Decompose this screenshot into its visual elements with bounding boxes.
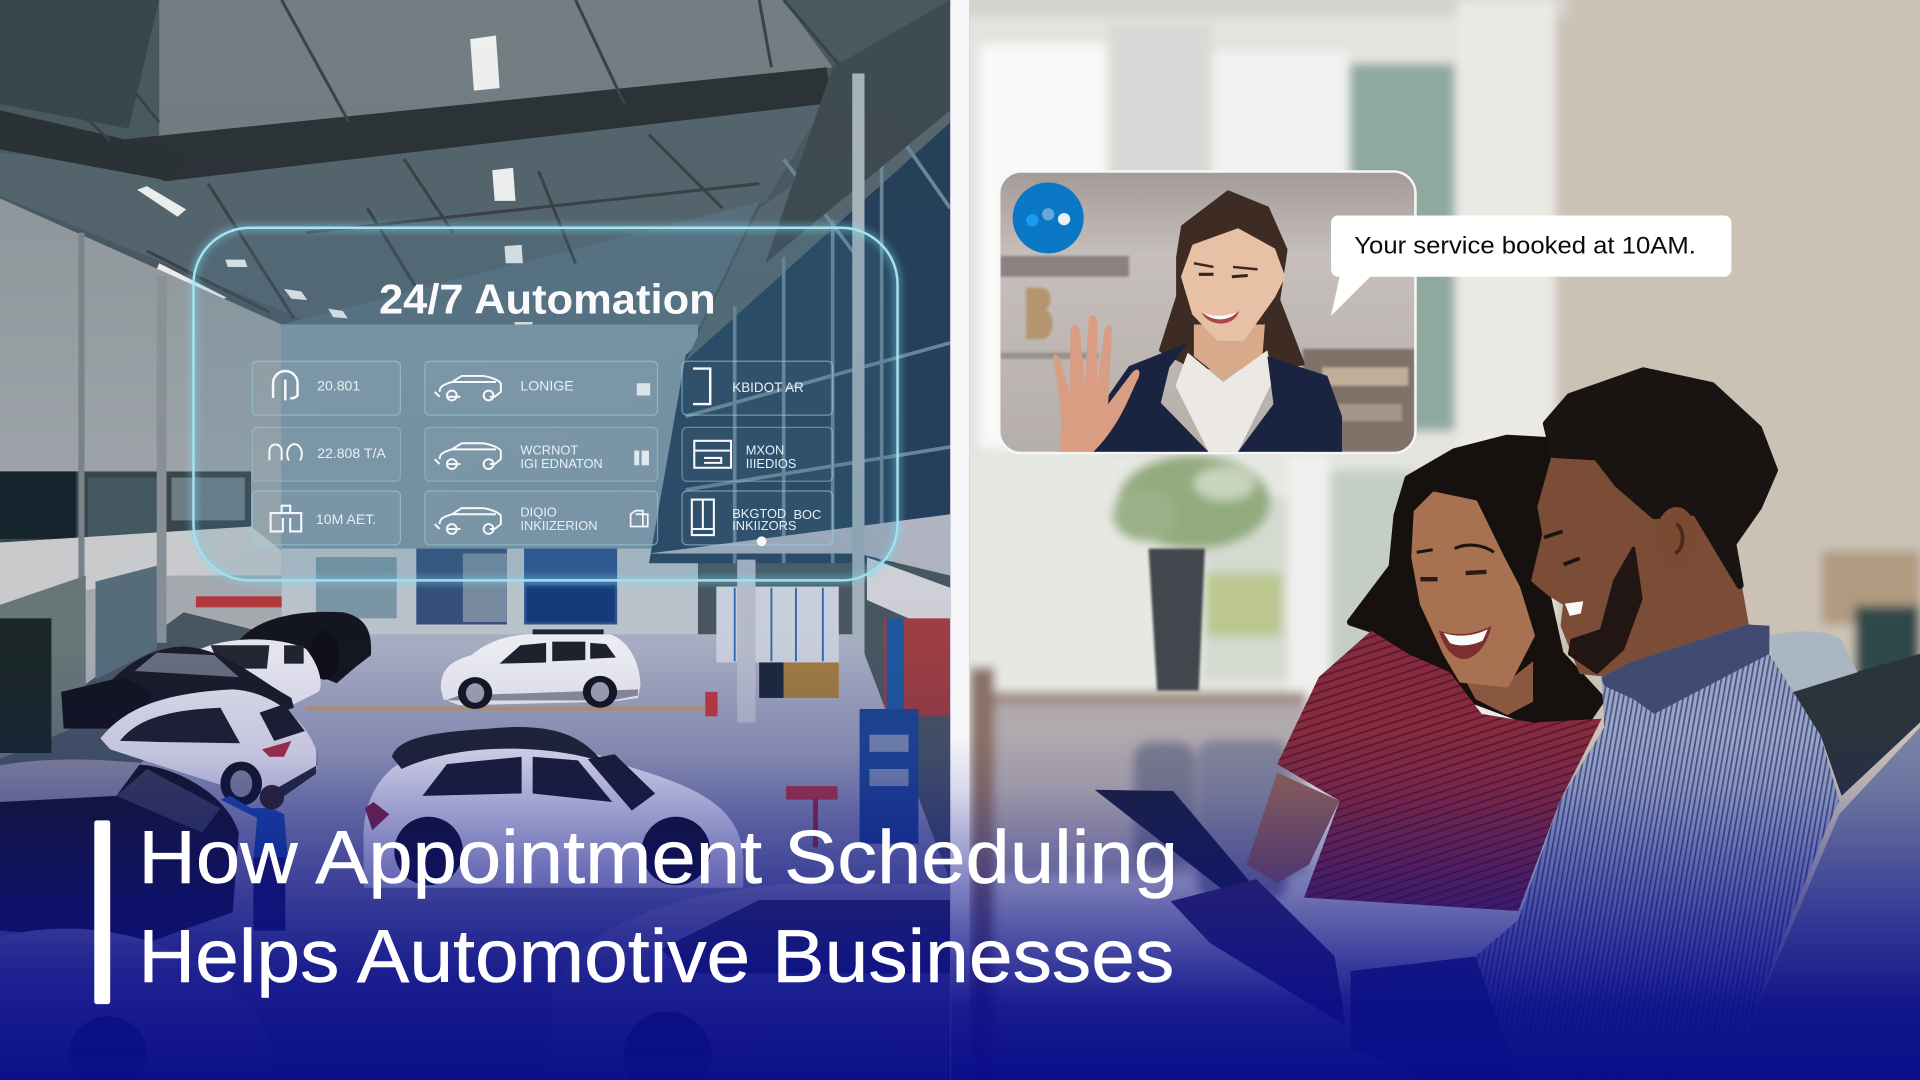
card: row 3 column 3 bbox=[682, 491, 833, 546]
card: row 2 column 1 bbox=[252, 427, 400, 481]
left wall bbox=[0, 198, 282, 759]
receptionist shirt and blazer bbox=[1176, 350, 1273, 452]
back wall with shop fronts bbox=[196, 324, 698, 637]
card: row 2 column 2: IGI EDNATON bbox=[520, 456, 603, 471]
office background bbox=[1000, 256, 1414, 452]
card: row 3 column 2: INKIIZERION bbox=[520, 518, 597, 533]
man face and neck bbox=[1533, 454, 1747, 677]
white SUV left bbox=[100, 689, 317, 808]
card: row 3 column 1 bbox=[252, 491, 400, 545]
foreground cars bbox=[22, 884, 950, 1018]
ceiling lights bbox=[137, 36, 533, 331]
workshop floor bbox=[0, 560, 950, 986]
parked cars bbox=[0, 612, 950, 1018]
card: row 3 column 2: DIQIO bbox=[520, 505, 557, 520]
card: row 3 column 2 bbox=[425, 491, 658, 545]
ceiling bbox=[0, 0, 857, 355]
card: row 2 column 1: 22.808 T/A bbox=[317, 445, 386, 461]
front dark car bbox=[0, 759, 239, 943]
right photo: living room bbox=[955, 0, 1920, 1080]
title accent bar bbox=[94, 820, 110, 1004]
tablet bbox=[1094, 790, 1250, 888]
bottom blue gradient overlay: right bbox=[950, 0, 1920, 1080]
card: row 3 column 3: BKGTOD bbox=[732, 506, 786, 521]
card: row 3 column 3: BOC bbox=[793, 507, 821, 522]
card: row 3 column 3: INKIIZORS bbox=[732, 518, 796, 533]
left photo: automotive service centre bbox=[0, 0, 950, 1080]
bottom blue gradient overlay: left bbox=[0, 0, 950, 1080]
main title bbox=[94, 815, 1178, 1004]
card: row 1 column 2 bbox=[425, 361, 658, 415]
glass automation panel bbox=[193, 228, 898, 580]
man on sofa bbox=[1171, 371, 1839, 1080]
main title: How Appointment Scheduling bbox=[138, 815, 1178, 899]
speech bubble: Your service booked at 10AM. bbox=[1354, 232, 1696, 259]
man ear bbox=[1660, 507, 1691, 519]
centre white SUV bbox=[441, 629, 640, 709]
speech bubble bbox=[1331, 216, 1731, 316]
panel heading: 24/7 Automation bbox=[379, 275, 716, 322]
card: row 2 column 3 bbox=[682, 427, 833, 481]
video call card bbox=[998, 170, 1417, 454]
card: row 2 column 2: WCRNOT bbox=[520, 442, 578, 457]
receptionist neck bbox=[1194, 324, 1265, 380]
right sofa and cushions bbox=[1764, 631, 1920, 996]
blurred room background bbox=[955, 0, 1920, 1080]
woman on sofa bbox=[1247, 438, 1602, 911]
left and right photo divider bbox=[950, 0, 970, 1080]
main title: Helps Automotive Businesses bbox=[138, 914, 1174, 998]
card: row 1 column 3: KBIDOT AR bbox=[732, 380, 804, 395]
card: row 1 column 1: 20.801 bbox=[317, 378, 360, 394]
rear white car bbox=[190, 639, 321, 704]
card: row 2 column 2 bbox=[425, 427, 658, 481]
receptionist hair bbox=[1161, 192, 1303, 367]
rear dark car bbox=[233, 612, 371, 683]
man beard bbox=[1570, 549, 1641, 672]
card: row 1 column 3 bbox=[682, 361, 833, 415]
card: row 1 column 2: LONIGE bbox=[520, 378, 574, 394]
mezzanine glazing bbox=[649, 0, 950, 716]
technician bbox=[220, 785, 288, 931]
card: row 3 column 1: 10M AET. bbox=[316, 511, 376, 527]
card: row 2 column 3: MXON bbox=[746, 442, 784, 457]
assistant logo bbox=[1013, 182, 1084, 253]
waving hand bbox=[1053, 315, 1139, 452]
card: row 2 column 3: IIIEDIOS bbox=[746, 456, 796, 471]
blurred sofa bbox=[1134, 740, 1288, 899]
potted plant bbox=[1113, 456, 1270, 691]
receptionist face bbox=[1183, 230, 1283, 339]
man hand bbox=[1171, 879, 1346, 1026]
centre large white car bbox=[363, 727, 743, 888]
man shirt bbox=[1476, 624, 1840, 1023]
dark car with glass roof bbox=[61, 647, 294, 729]
card: row 1 column 1 bbox=[252, 361, 400, 415]
service rack and cart bbox=[786, 709, 918, 847]
man hair bbox=[1547, 371, 1774, 585]
